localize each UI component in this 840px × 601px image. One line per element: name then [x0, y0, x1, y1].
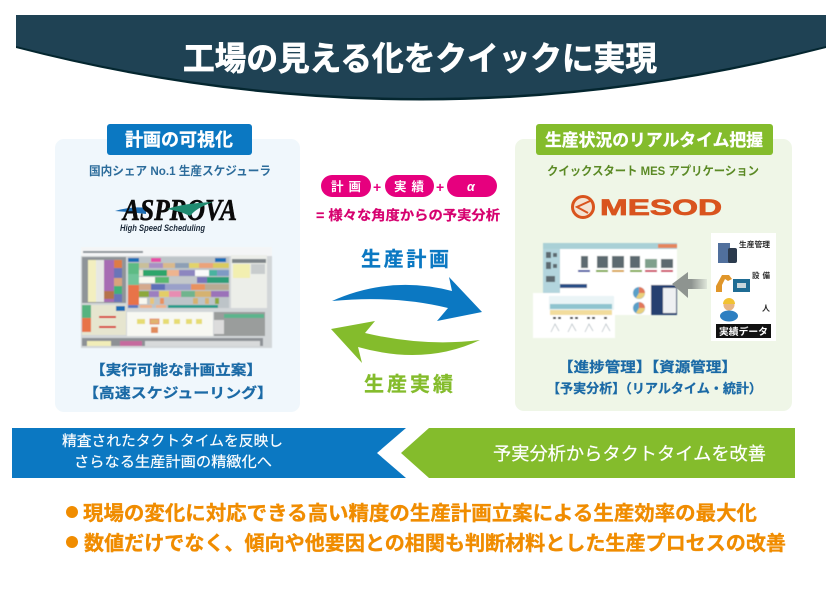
banner: improve takt time: [401, 428, 795, 478]
heading badge: plan: 計画の可視化: [125, 130, 233, 150]
bullet list: conclusions: [66, 502, 786, 555]
logo: MESOD: MESOD: [600, 195, 722, 220]
panel caption: status features: 【進捗管理】【資源管理】: [558, 359, 737, 375]
screenshot: MES dashboard: [533, 243, 677, 338]
panel caption: plan features: 【高速スケジューリング】: [83, 385, 273, 401]
banner: improve takt time: 予実分析からタクトタイムを改善: [493, 444, 766, 464]
formula: plan + actual + alpha: +: [373, 179, 381, 195]
panel caption: plan features: [83, 362, 273, 401]
box: actual data sources: [711, 233, 776, 341]
title: 工場の見える化をクイックに実現: [183, 40, 657, 77]
label: production actual: 生産実績: [364, 373, 453, 396]
title banner: [16, 15, 826, 100]
banner: feedback to plan: さらなる生産計画の精緻化へ: [74, 454, 272, 471]
panel: production plan visualization: [55, 124, 300, 412]
heading badge: status: [536, 124, 773, 155]
box: actual data sources: 設備: [752, 270, 770, 280]
logo: Asprova: ASPROVA: [121, 192, 237, 227]
icon: worker: [720, 298, 738, 322]
arrow: data flows into dashboard: [672, 272, 707, 298]
heading badge: status: 生産状況のリアルタイム把握: [545, 131, 763, 150]
formula: plan + actual + alpha: [316, 175, 501, 223]
bullet 2: 数値だけでなく、傾向や他要因との相関も判断材料とした生産プロセスの改善: [84, 532, 786, 555]
banner: feedback to plan: 精査されたタクトタイムを反映し: [62, 433, 283, 450]
box: actual data sources: 人: [762, 304, 770, 313]
panel caption: status features: [547, 359, 762, 396]
logo: Asprova: High Speed Scheduling: [120, 223, 205, 234]
banner: feedback to plan: [12, 428, 406, 478]
formula: plan + actual + alpha: 実績: [394, 179, 424, 194]
panel caption: plan features: 【実行可能な計画立案】: [90, 362, 262, 378]
logo: Asprova: [115, 192, 237, 234]
formula: plan + actual + alpha: α: [467, 180, 476, 194]
panel: real-time production status: [515, 124, 792, 411]
panel caption: status features: 【予実分析】（リアルタイム・統計）: [547, 381, 762, 396]
box: actual data sources: 生産管理: [739, 239, 771, 249]
formula: plan + actual + alpha: 計画: [331, 179, 361, 194]
arrow: blue plan to actual: [332, 277, 482, 321]
heading badge: plan: [107, 124, 252, 155]
arrow: green actual to plan: [331, 321, 480, 363]
icon: robot and machine: [716, 275, 750, 292]
label: actual data: 実績データ: [719, 326, 768, 338]
subheading: MES application: クイックスタート MES アプリケーション: [547, 164, 759, 178]
subheading: scheduler: 国内シェア No.1 生産スケジューラ: [89, 163, 271, 178]
logo: MESOD: [572, 195, 722, 220]
screenshot: scheduler software: [81, 247, 272, 348]
sub-window: daily report: [533, 293, 615, 338]
formula: plan + actual + alpha: +: [436, 179, 444, 195]
bullet 1: 現場の変化に対応できる高い精度の生産計画立案による生産効率の最大化: [83, 502, 757, 525]
label: production plan: 生産計画: [361, 248, 449, 271]
formula result: = 様々な角度からの予実分析: [316, 207, 501, 223]
icon: server: [718, 243, 737, 263]
